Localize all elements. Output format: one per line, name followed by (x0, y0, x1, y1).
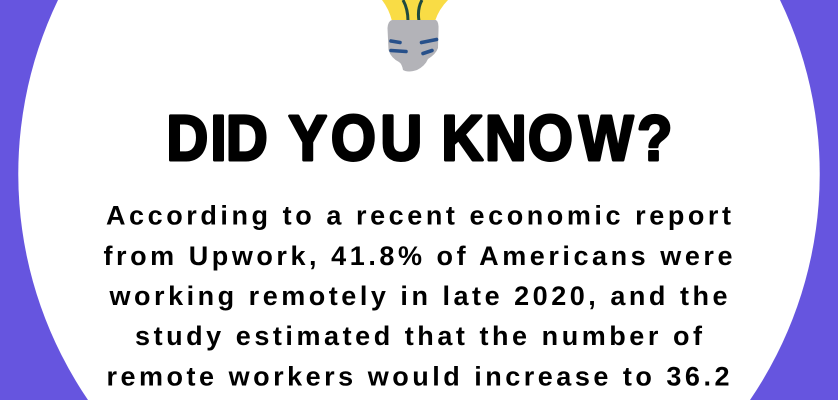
body text: According to a recent economic report (106, 200, 731, 230)
body text: study estimated that the number of (135, 321, 703, 351)
body text (104, 200, 732, 392)
title: DID YOU KNOW? (0, 102, 672, 173)
body text: working remotely in late 2020, and the (108, 281, 728, 311)
body text: remote workers would increase to 36.2 (106, 362, 730, 392)
body text: from Upwork, 41.8% of Americans were (104, 241, 732, 271)
icon: light bulb (382, 0, 448, 72)
